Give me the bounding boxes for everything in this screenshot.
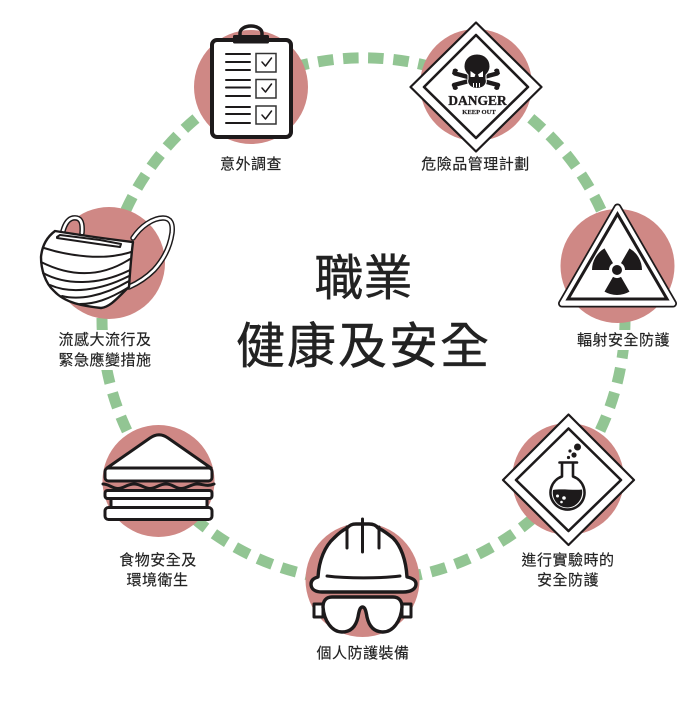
pink circle <box>420 29 532 141</box>
label: 個人防護裝備 <box>316 645 410 662</box>
pink circle <box>53 207 165 319</box>
label: 緊急應變措施 <box>58 351 152 369</box>
pink circle <box>560 209 674 323</box>
item: food safety <box>102 425 214 590</box>
pink circle <box>512 423 624 535</box>
title <box>236 252 491 374</box>
label: 流感大流行及 <box>58 330 152 348</box>
title: 健康及安全 <box>236 320 491 374</box>
icon: helmet and goggles <box>311 519 416 632</box>
label: 食物安全及 <box>119 552 197 569</box>
icon: surgical mask <box>41 218 172 308</box>
icon: clipboard checklist <box>212 26 291 137</box>
pink circle <box>102 425 214 537</box>
pink circle <box>194 30 308 144</box>
title: 職業 <box>314 252 413 306</box>
label text: 危險品管理計劃 <box>421 155 530 173</box>
icon: flask diamond <box>503 414 634 545</box>
icon: sandwich <box>103 435 214 520</box>
icon: danger diamond: KEEP OUT <box>462 109 496 116</box>
dashed green ring <box>97 53 630 585</box>
item: pandemic response <box>41 207 172 370</box>
label <box>518 550 618 590</box>
pink circle <box>306 523 420 637</box>
item: personal protective equipment <box>306 519 420 662</box>
label background <box>420 154 532 174</box>
icon: radiation triangle <box>562 208 673 304</box>
label background <box>574 330 672 350</box>
item: hazardous materials <box>410 22 542 174</box>
label <box>116 550 200 590</box>
item: radiation protection <box>560 208 674 350</box>
label: 進行實驗時的 <box>521 551 615 569</box>
item: incident investigation <box>194 26 308 173</box>
icon: danger diamond: DANGER <box>448 93 507 108</box>
label: 輻射安全防護 <box>577 332 670 349</box>
item: laboratory safety <box>503 414 634 590</box>
label: 安全防護 <box>537 572 599 589</box>
label <box>58 330 153 370</box>
label: 環境衛生 <box>126 571 189 589</box>
label: 意外調查 <box>220 155 282 173</box>
icon: danger diamond <box>410 22 542 152</box>
